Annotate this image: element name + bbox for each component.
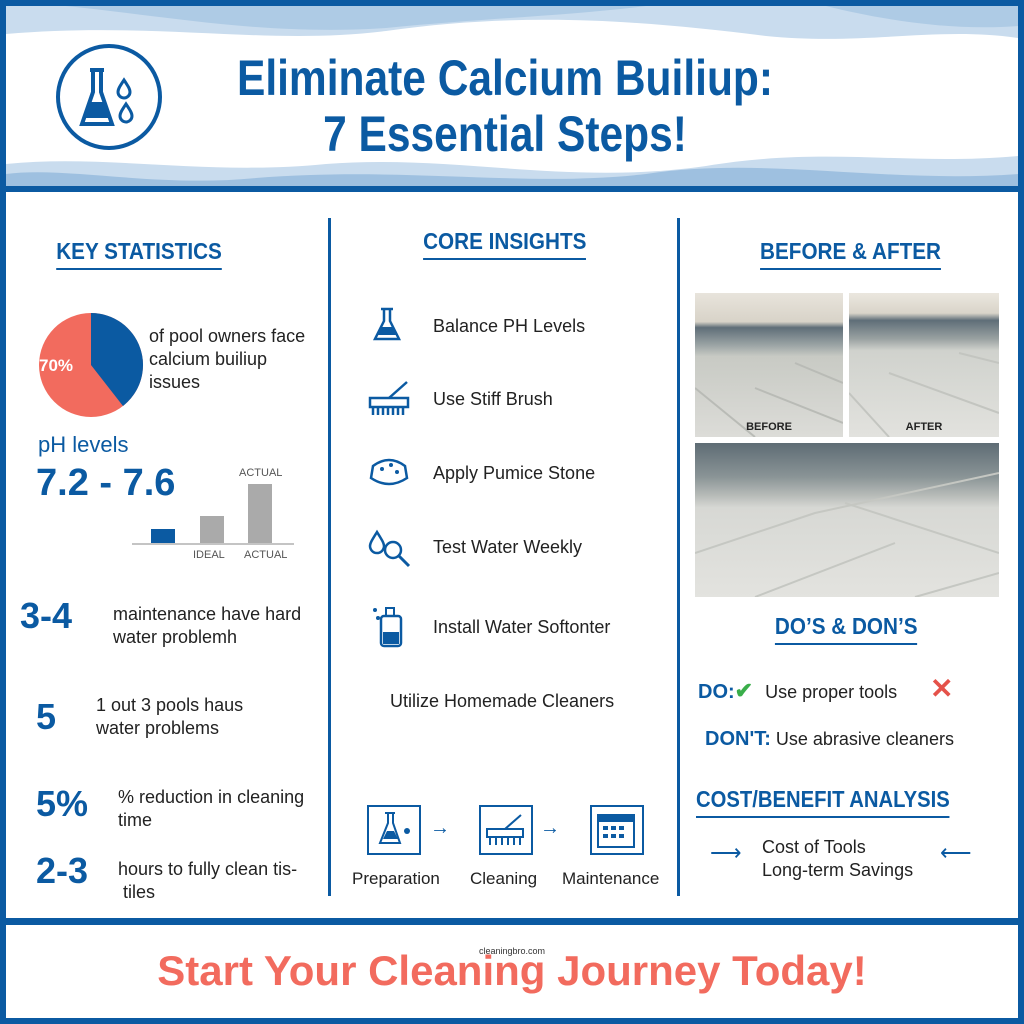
pie chart 70% [39,313,143,417]
item: test water [368,530,582,567]
cost benefit text: ⟵ [940,840,972,865]
panel: key statistics: time [118,810,152,830]
source label: cleaningbro.com [479,946,545,956]
item: stiff brush [368,381,553,415]
panel: key statistics: 7.2 - 7.6 [36,462,175,504]
footer divider [0,918,1024,925]
panel: key statistics: water problemh [113,627,237,647]
item: pumice: Apply Pumice Stone [433,463,595,483]
photo: after [849,293,999,437]
heading: cost/benefit: COST/BENEFIT ANALYSIS [696,786,950,812]
cost benefit text: ⟶ [710,840,742,865]
item: balance ph: Balance PH Levels [433,316,585,336]
panel: key statistics [20,238,305,902]
photo: before: BEFORE [746,421,792,433]
heading: before & after: BEFORE & AFTER [760,238,941,264]
process flow: → [540,817,560,839]
title [237,50,773,162]
item: stiff brush: Use Stiff Brush [433,389,553,409]
heading: do's & don'ts: DO’S & DON’S [775,613,918,639]
bar chart: ACTUAL [244,549,287,561]
item: balance ph [373,308,585,340]
process flow: → [430,817,450,839]
icon: flask logo [56,44,162,150]
panel: before & after [695,238,999,880]
item: homemade cleaners: Utilize Homemade Cleaners [390,691,614,711]
column dividers [328,218,331,896]
header [6,6,1018,188]
stat: 5: 5 [36,696,56,737]
heading: key statistics: KEY STATISTICS [56,238,222,264]
panel: key statistics: hours to fully clean tis- [118,859,297,879]
process flow: Cleaning [470,869,537,888]
do item [698,673,953,704]
item: water softener: Install Water Softonter [433,617,610,637]
panel: key statistics: % reduction in cleaning [118,787,304,807]
pie chart 70%: 70% [39,356,73,375]
bar chart [132,467,294,561]
process flow [352,805,659,888]
footer [157,946,867,994]
cost benefit text: Cost of Tools [762,837,866,857]
call to action: Start Your Cleaning Journey Today! [157,947,867,994]
panel: core insights [352,228,659,888]
cost benefit text [710,837,972,880]
stat text: pool owners: issues [149,372,200,392]
photo: before [695,293,843,437]
pH levels: pH levels [38,432,128,457]
panel: key statistics: tiles [123,882,155,902]
item: pumice [370,458,595,486]
stat: 2-3: 2-3 [36,850,88,891]
bar chart: IDEAL [193,549,225,561]
stat text: pool owners: calcium builiup [149,349,267,369]
panel: key statistics: maintenance have hard [113,604,301,624]
do item: DO:✔ Use proper tools [698,678,897,703]
header divider [0,186,1024,192]
stat: 5%: 5% [36,783,88,824]
photo: after: AFTER [906,421,942,433]
item: test water: Test Water Weekly [433,537,582,557]
item: water softener [373,607,610,648]
process flow: Maintenance [562,869,659,888]
title: Eliminate Calcium Builiup: [237,50,773,106]
don't item: DON'T: Use abrasive cleaners [705,728,954,750]
stat text: pool owners [149,326,305,392]
bar chart: ACTUAL [239,467,282,479]
panel: key statistics: 1 out 3 pools haus [96,695,243,715]
do item: ✕ [930,673,953,704]
heading: core insights: CORE INSIGHTS [423,228,586,254]
stat: 3-4: 3-4 [20,595,72,636]
title: 7 Essential Steps! [323,106,687,162]
cost benefit text: Long-term Savings [762,860,913,880]
stat text: pool owners: of pool owners face [149,326,305,346]
panel: key statistics: water problems [96,718,219,738]
photo: wide [695,443,999,597]
process flow: Preparation [352,869,440,888]
